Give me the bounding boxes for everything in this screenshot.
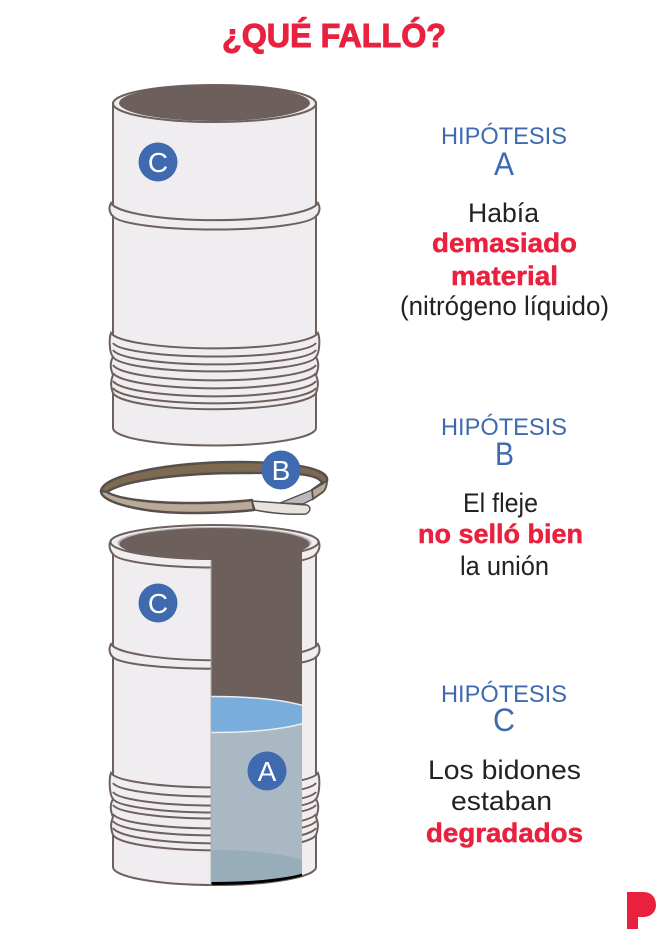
text block: hypothesis A: material [451,261,558,291]
text block: hypothesis B: la unión [460,551,549,581]
text block: hypothesis A: HIPÓTESIS [441,123,567,150]
text block: hypothesis A [400,123,609,321]
text block: hypothesis B [418,414,583,581]
text block: hypothesis A: Había [468,198,540,228]
middle reinforcing band [110,644,319,669]
strap wedge [280,490,313,504]
marker A: A [258,756,277,787]
top rim band [110,525,319,568]
text block: hypothesis C: estaban [451,786,552,816]
marker C [138,142,178,182]
text block: hypothesis B: B [495,436,514,472]
text block: hypothesis C: Los bidones [428,755,581,785]
marker C [138,584,178,622]
strap front [101,491,254,513]
marker C: C [148,588,168,619]
illustration: upper drum [110,85,319,445]
text block: hypothesis B: no selló bien [418,519,583,549]
text block: hypothesis C: degradados [426,818,583,848]
text block: hypothesis A: demasiado [432,228,577,258]
text block: hypothesis A: A [494,146,515,182]
text block: hypothesis C: HIPÓTESIS [441,681,567,708]
illustration: lower drum cutaway [110,525,319,885]
logo mark [627,892,656,929]
upper reinforcing band [110,203,319,230]
lower ribbed section [110,773,319,850]
marker C: C [148,147,168,178]
text block: hypothesis B: HIPÓTESIS [441,414,567,441]
drum rim opening [113,85,316,122]
illustration: metal strap [101,450,327,514]
marker B [262,450,300,490]
text block: hypothesis C: C [493,702,515,738]
title: ¿QUÉ FALLÓ? [222,17,446,54]
marker B: B [272,455,290,486]
text block: hypothesis A: (nitrógeno líquido) [400,291,609,321]
strap free end [252,501,310,514]
text block: hypothesis C [426,681,583,848]
marker A [248,752,286,790]
cutaway interior [210,550,302,885]
lower ribbed section [110,333,319,409]
strap back [101,462,327,492]
strap right end [312,481,327,499]
text block: hypothesis B: El fleje [463,488,538,518]
